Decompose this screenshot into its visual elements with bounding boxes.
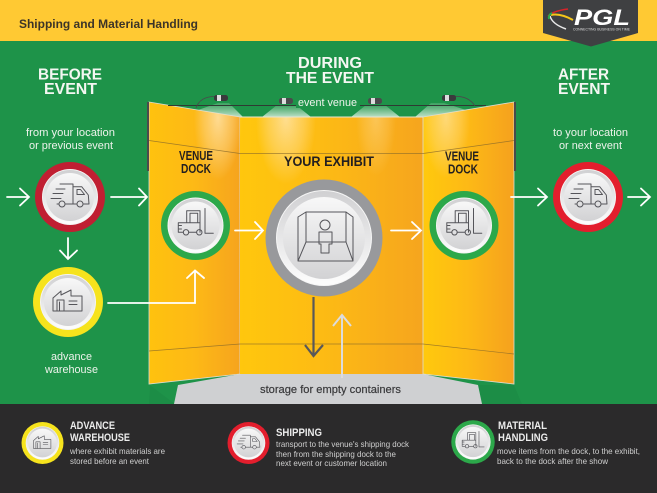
arrow: exhibit to right dock <box>391 222 421 239</box>
heading: during the event: DURING <box>298 55 362 72</box>
legend text: advance warehouse: WAREHOUSE <box>70 432 130 444</box>
icon: your exhibit booth <box>266 180 382 296</box>
legend text: material handling: MATERIAL <box>498 420 547 432</box>
legend text: shipping: then from the shipping dock to the <box>276 449 396 459</box>
icon: forklift, right dock <box>430 191 498 260</box>
label: venue dock right: VENUE <box>445 150 479 164</box>
text: storage for empty containers: storage for empty containers <box>260 384 402 396</box>
spotlights <box>196 95 475 108</box>
arrow: dock to exhibit <box>235 222 263 239</box>
text: advance warehouse: warehouse <box>44 364 98 376</box>
arrow: truck to warehouse <box>60 238 77 259</box>
booth posts and truss <box>147 102 516 171</box>
legend text: advance warehouse: where exhibit materials are <box>69 446 165 456</box>
header band <box>0 0 657 41</box>
icon: advance warehouse <box>33 267 103 337</box>
legend icon: advance warehouse <box>22 422 64 464</box>
legend icon: shipping <box>228 422 270 464</box>
logo: PGL: CONNECTING BUSINESS ON TIME <box>573 28 631 32</box>
icon: forklift, left dock <box>161 191 230 260</box>
icon: truck, before event <box>35 162 105 232</box>
label: venue dock left <box>179 149 213 176</box>
legend text: shipping: next event or customer location <box>276 458 387 468</box>
text: event venue: event venue <box>298 97 357 109</box>
exhibit booth <box>147 95 516 384</box>
arrow: truck to booth <box>111 188 147 206</box>
green background <box>0 41 657 405</box>
heading: after event: AFTER <box>558 66 609 84</box>
heading: before event: BEFORE <box>38 66 102 84</box>
arrow: after truck onward <box>628 188 650 206</box>
label: venue dock left: VENUE <box>179 149 213 163</box>
heading: after event <box>558 66 610 98</box>
panel: legend <box>0 404 657 493</box>
arrow: warehouse to dock <box>108 270 204 303</box>
legend text: advance warehouse: stored before an event <box>70 456 150 466</box>
heading: during the event <box>286 55 374 87</box>
icon: truck, after event <box>553 162 623 232</box>
heading: before event: EVENT <box>44 81 97 98</box>
text: advance warehouse <box>44 351 98 376</box>
text: from your location <box>26 127 115 152</box>
arrow: exhibit to storage <box>305 297 323 356</box>
text: to your location: or next event <box>559 140 622 152</box>
legend text: advance warehouse <box>69 420 165 466</box>
light cones <box>198 103 466 117</box>
text: to your location: to your location <box>553 127 628 139</box>
label backing: event venue <box>296 97 360 108</box>
heading: before event <box>38 66 102 98</box>
legend text: advance warehouse: ADVANCE <box>70 420 115 432</box>
logo: PGL: PGL <box>574 5 630 30</box>
heading: after event: EVENT <box>558 81 610 98</box>
floor: storage area <box>149 374 522 404</box>
label: venue dock right <box>445 150 479 176</box>
logo: PGL <box>543 0 638 46</box>
text: advance warehouse: advance <box>51 351 92 363</box>
legend text: shipping: transport to the venue's shipping dock <box>276 439 410 449</box>
booth panels <box>148 102 514 384</box>
text: to your location <box>553 127 628 152</box>
arrow: booth to after truck <box>511 188 547 206</box>
heading: during the event: THE EVENT <box>286 70 374 87</box>
label: venue dock right: DOCK <box>448 162 478 176</box>
arrow: into before truck <box>7 188 29 206</box>
legend text: shipping: SHIPPING <box>276 427 322 439</box>
label: venue dock left: DOCK <box>181 162 211 176</box>
legend icon: material handling <box>451 420 495 464</box>
legend text: shipping <box>276 427 410 468</box>
legend text: material handling: back to the dock after the show <box>497 456 609 466</box>
title: Shipping and Material Handling <box>19 17 198 31</box>
legend text: material handling: HANDLING <box>498 432 548 444</box>
arrow: storage to exhibit <box>333 315 351 378</box>
legend text: material handling: move items from the dock, to the exhibit, <box>497 446 640 456</box>
label: your exhibit: YOUR EXHIBIT <box>284 153 374 169</box>
text: from your location: from your location <box>26 127 115 139</box>
text: from your location: or previous event <box>29 140 113 152</box>
legend text: material handling <box>497 420 640 466</box>
